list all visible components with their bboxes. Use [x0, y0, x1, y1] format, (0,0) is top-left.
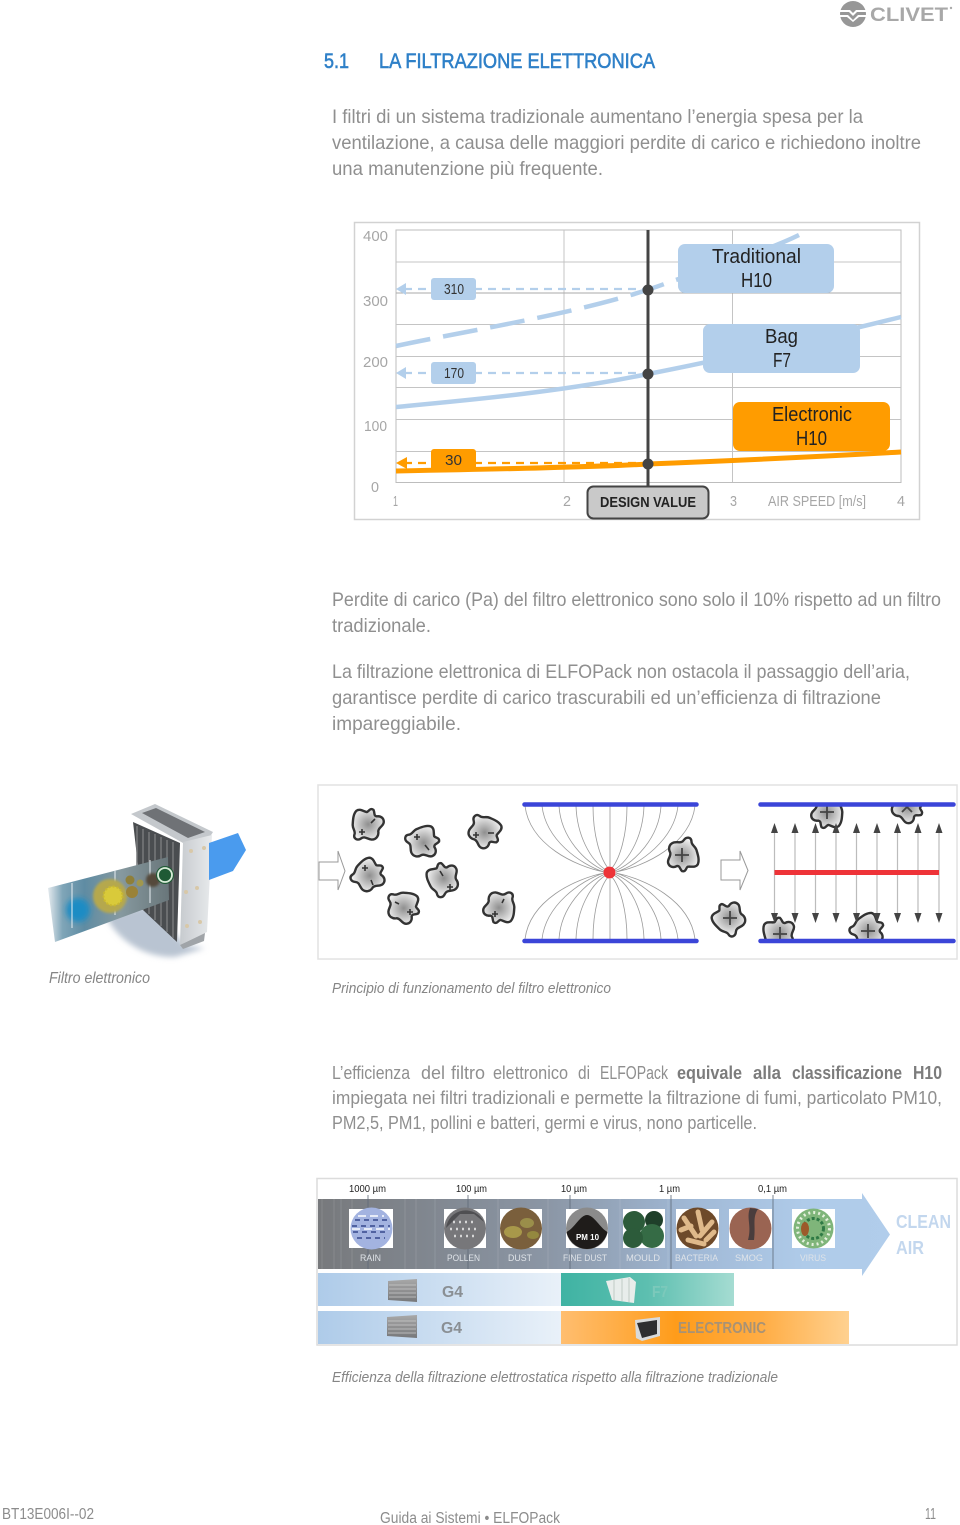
paragraph: pressure drop comparison: tradizionale. — [332, 615, 431, 637]
bar: G4 plus electronic: G4 — [441, 1320, 462, 1337]
size scale: 0,1 µm — [758, 1183, 787, 1195]
intro paragraph: I filtri di un sistema tradizionale aumentano l’energia spesa per la — [332, 106, 863, 128]
logo: Clivet: CLIVET — [870, 5, 948, 26]
axis labels: 4 — [897, 494, 905, 510]
electrode plates: ionising stage — [524, 804, 696, 941]
reference dashes — [404, 289, 645, 463]
particle labels: DUST — [508, 1253, 532, 1264]
bar: G4 plus F7: F7 — [652, 1284, 668, 1301]
icon: pollen — [444, 1208, 486, 1250]
size scale: 1 µm — [659, 1183, 680, 1195]
particles: charged dust — [348, 806, 517, 927]
section heading: LA FILTRAZIONE ELETTRONICA — [379, 50, 655, 73]
paragraph: H10 equivalence: ELFOPack — [600, 1062, 669, 1083]
paragraph: H10 equivalence: classificazione — [792, 1062, 902, 1083]
section heading: 5.1 — [324, 50, 349, 73]
paragraph: ELFOPack filtration: impareggiabile. — [332, 713, 461, 735]
label: electronic H10 — [733, 402, 890, 451]
icon: virus — [792, 1208, 835, 1248]
panel: operating principle — [318, 785, 957, 959]
label: traditional H10: H10 — [741, 270, 772, 292]
curve: electronic H10 — [396, 452, 901, 471]
value tag: 30 — [431, 449, 476, 471]
intro paragraph — [332, 106, 921, 180]
value tag: 310 — [431, 278, 476, 300]
paragraph: H10 equivalence: di — [578, 1062, 590, 1083]
paragraph: H10 equivalence: del — [421, 1062, 445, 1083]
arrow: incoming air — [319, 851, 345, 890]
logo: Clivet — [839, 1, 952, 27]
paragraph: H10 equivalence: elettronico — [493, 1062, 568, 1083]
bar: G4 plus F7 — [318, 1273, 734, 1306]
paragraph: H10 equivalence: filtro — [451, 1062, 485, 1083]
axis labels — [363, 229, 905, 510]
label: electronic H10: H10 — [796, 428, 827, 450]
value tag: 170: 170 — [444, 366, 464, 382]
clean air label: CLEAN — [896, 1212, 951, 1232]
intro paragraph: una manutenzione più frequente. — [332, 158, 603, 180]
arrow: to collector stage — [721, 851, 748, 890]
label: traditional H10: Traditional — [712, 246, 801, 268]
particle labels: VIRUS — [800, 1253, 826, 1264]
caption: filtro elettronico: Filtro elettronico — [49, 970, 150, 987]
axis labels: 300 — [363, 294, 388, 310]
design value box: DESIGN VALUE — [600, 494, 696, 511]
caption: efficiency: Efficienza della filtrazione elettrostatica rispetto alla filtrazione tradizionale — [332, 1370, 778, 1386]
icon: mould — [623, 1209, 665, 1248]
particle labels: RAIN — [360, 1253, 381, 1264]
label: bag F7: Bag — [765, 326, 798, 348]
footer: BT13E006I--02 — [2, 1506, 94, 1523]
paragraph: H10 equivalence: H10 — [913, 1062, 942, 1083]
icon: dust — [500, 1208, 542, 1250]
axis labels: AIR SPEED [m/s] — [768, 494, 866, 510]
value tag: 30: 30 — [445, 453, 462, 469]
icon: fine dust PM10: PM 10 — [576, 1233, 600, 1242]
axis labels: 1 — [393, 494, 398, 510]
footer: 11 — [925, 1506, 936, 1523]
clean air label: AIR — [896, 1238, 924, 1258]
size scale: 100 µm — [456, 1183, 487, 1195]
icon: bacteria — [676, 1208, 719, 1250]
paragraph: H10 equivalence: equivale — [677, 1062, 742, 1083]
paragraph: H10 equivalence — [332, 1062, 942, 1133]
value tag: 310: 310 — [444, 282, 464, 298]
paragraph: H10 equivalence: PM2,5, PM1, pollini e batteri, germi e virus, nono particelle. — [332, 1112, 757, 1133]
paragraph: ELFOPack filtration — [332, 661, 910, 735]
particle labels: POLLEN — [447, 1253, 480, 1264]
chart: pressure drop versus air speed — [354, 222, 920, 520]
intro paragraph: ventilazione, a causa delle maggiori perdite di carico e richiedono inoltre — [332, 132, 921, 154]
electrode plates: collector stage — [760, 804, 954, 941]
size scale — [349, 1183, 787, 1269]
illustration: electronic filter — [48, 804, 246, 957]
design value line — [646, 230, 650, 487]
particle labels — [360, 1253, 826, 1264]
paragraph: pressure drop comparison — [332, 589, 941, 637]
label: bag F7 — [703, 324, 860, 373]
particle labels: MOULD — [626, 1253, 660, 1264]
paragraph: H10 equivalence: L’efficienza — [332, 1062, 411, 1083]
paragraph: ELFOPack filtration: La filtrazione elettronica di ELFOPack non ostacola il passaggio dell’aria, — [332, 661, 910, 683]
label: electronic H10: Electronic — [772, 404, 852, 426]
particle labels: BACTERIA — [675, 1253, 719, 1264]
curve: bag F7 — [396, 317, 901, 407]
label: bag F7: F7 — [773, 350, 791, 372]
clean air label — [896, 1212, 951, 1258]
paragraph: H10 equivalence: alla — [753, 1062, 782, 1083]
curve: traditional H10 — [396, 233, 803, 346]
particle labels: SMOG — [735, 1253, 763, 1264]
footer — [2, 1506, 936, 1525]
field lines around the ionising wire — [525, 806, 695, 939]
value tag: 170 — [431, 362, 476, 384]
chart: particle size versus filter class — [317, 1178, 957, 1345]
axis labels: 3 — [730, 494, 737, 510]
size scale: 1000 µm — [349, 1183, 386, 1195]
particle labels: FINE DUST — [563, 1253, 607, 1264]
particle size arrow — [318, 1193, 890, 1276]
label: traditional H10 — [678, 244, 834, 293]
design value box — [588, 486, 708, 518]
charged plate — [774, 870, 939, 875]
size scale: 10 µm — [561, 1183, 587, 1195]
caption: principle: Principio di funzionamento del filtro elettronico — [332, 981, 611, 997]
icon: rain — [349, 1208, 393, 1250]
paragraph: ELFOPack filtration: garantisce perdite di carico trascurabili ed un’efficienza di filtrazione — [332, 687, 881, 709]
axis labels: 100 — [364, 419, 387, 435]
icon: fine dust PM10 — [566, 1208, 608, 1250]
collected particles — [762, 806, 924, 939]
bar: G4 plus electronic — [318, 1311, 849, 1344]
bar: G4 plus F7: G4 — [442, 1284, 463, 1301]
axis labels: 200 — [363, 355, 388, 371]
ionising wire — [604, 866, 616, 878]
axis labels: 0 — [371, 480, 379, 496]
icon: smog — [729, 1208, 772, 1250]
axis labels: 2 — [563, 494, 571, 510]
field arrows — [771, 823, 942, 923]
axis labels: 400 — [363, 229, 388, 245]
charged particles: positive — [660, 834, 751, 939]
bar: G4 plus electronic: ELECTRONIC — [678, 1320, 766, 1337]
